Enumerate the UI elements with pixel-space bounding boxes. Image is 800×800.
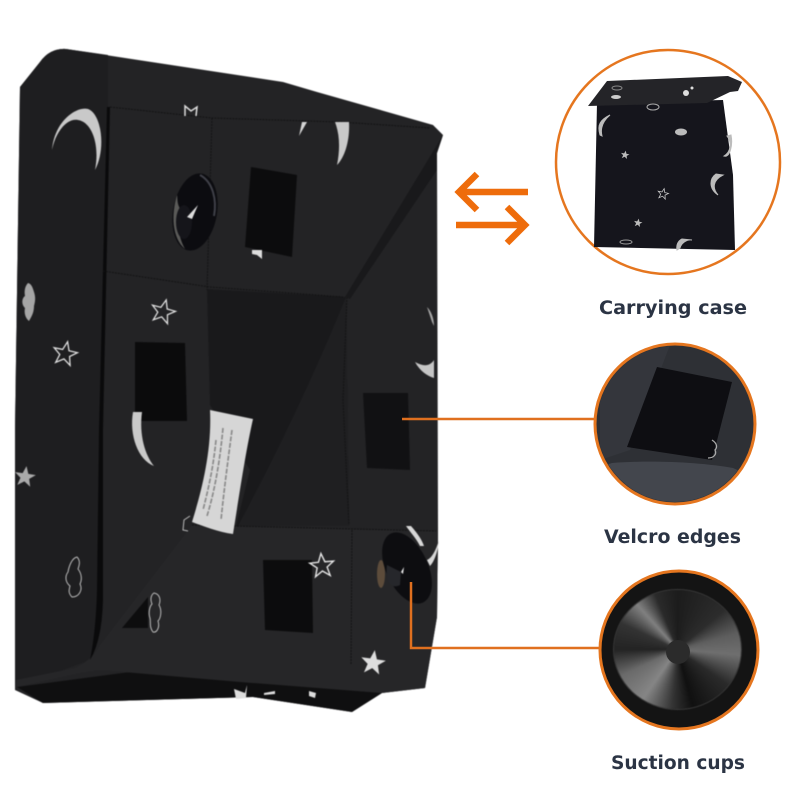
- callout: suction cups base: [600, 571, 758, 729]
- icon: exchange arrows: [456, 174, 528, 243]
- circle frame: [556, 50, 780, 274]
- left vertical fold shadow: [90, 107, 110, 660]
- suction cup top: [167, 170, 223, 254]
- velcro patch bottom: [263, 560, 313, 633]
- suction cup close-up disc: [614, 590, 741, 709]
- outlined cloud center: [149, 593, 161, 632]
- heading: velcro edges: Velcro edges: [604, 527, 741, 548]
- left side strip: [15, 49, 108, 690]
- heading: suction cups: Suction cups: [611, 753, 745, 774]
- suction cup bottom: [372, 525, 442, 611]
- suction leader line: [411, 582, 600, 648]
- bag star lower: [633, 218, 643, 227]
- small star fragment, under velcro: [252, 250, 262, 259]
- bag clouds: [611, 86, 694, 244]
- circle frame: [595, 344, 755, 504]
- bottom pocket shadow: [17, 672, 382, 712]
- crescent moon, upper right: [335, 122, 349, 165]
- velcro patch left: [135, 342, 187, 421]
- right edge of the fold: [345, 135, 443, 299]
- bag moons: [599, 115, 732, 250]
- bag stars: [620, 150, 630, 159]
- crescent moon, top left: [52, 109, 101, 170]
- small cloud fragment by label: [183, 516, 190, 531]
- velcro patch top: [245, 167, 297, 257]
- bag stars outlined: [657, 188, 669, 199]
- top flap seams: [103, 107, 436, 665]
- bag flap: [588, 76, 742, 106]
- left arrow: [459, 174, 528, 210]
- filled star bottom right: [359, 648, 387, 675]
- callout: carrying case: [556, 50, 780, 274]
- outlined star bottom: [309, 553, 335, 577]
- care label: [192, 410, 253, 534]
- small moon fragment: [299, 122, 307, 136]
- main product: folded curtain: [13, 49, 443, 712]
- outlined star 1: [149, 297, 178, 325]
- crescent moon, right edge: [415, 360, 434, 378]
- inner panel diagonal fold: [238, 297, 349, 526]
- filled star left: [13, 465, 37, 487]
- curtain body: [15, 49, 443, 712]
- inner dark panel: [207, 289, 349, 526]
- crescent sliver, right edge: [427, 307, 434, 326]
- dark corner beside the cloud: [122, 597, 148, 628]
- filled cloud left: [22, 283, 35, 321]
- right arrow: [456, 207, 525, 243]
- suction cup centre knob: [666, 640, 690, 664]
- bag body: [594, 100, 735, 250]
- small star fragment, top: [185, 106, 197, 116]
- callout: velcro edges: [590, 344, 760, 510]
- outlined cloud left: [66, 557, 81, 597]
- heading: carrying case: Carrying case: [599, 298, 747, 319]
- crescent moon, center: [132, 412, 154, 466]
- moon behind bottom cup: [406, 526, 439, 566]
- velcro leader line: [402, 418, 596, 420]
- bottom edge markers: [234, 685, 316, 699]
- velcro close-up: [608, 367, 738, 502]
- lower flap: [15, 525, 438, 693]
- outlined star 2: [51, 339, 79, 366]
- velcro patch right: [363, 393, 410, 470]
